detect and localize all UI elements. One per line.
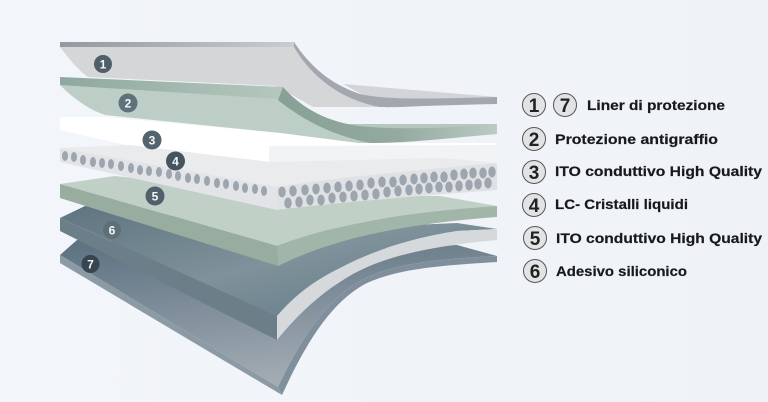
legend row: ITO second: 5 bbox=[530, 229, 541, 250]
legend row: adhesive: Adesivo siliconico bbox=[556, 263, 687, 279]
badge 3: 3 bbox=[149, 134, 156, 148]
legend row: adhesive bbox=[524, 260, 687, 283]
legend row: ITO second: ITO conduttivo High Quality bbox=[556, 230, 762, 246]
badge 2 bbox=[118, 94, 138, 112]
legend row: scratch protection: 2 bbox=[529, 130, 539, 151]
layer 1: top liner bbox=[60, 42, 497, 107]
crystal dots bbox=[62, 151, 496, 208]
legend row: scratch protection bbox=[522, 128, 718, 151]
badge 6 bbox=[103, 221, 121, 239]
layer 3: conductive ITO white bbox=[60, 117, 497, 170]
legend row: ITO second bbox=[524, 226, 762, 250]
legend row: ITO bbox=[522, 160, 762, 184]
badge 5 bbox=[146, 186, 164, 206]
badge 1: 1 bbox=[100, 58, 107, 72]
legend row: liner: 1 bbox=[529, 96, 540, 117]
legend row: ITO: 3 bbox=[529, 163, 539, 184]
legend row: LC bbox=[522, 194, 688, 217]
badge 7 bbox=[82, 255, 100, 273]
legend row: LC: 4 bbox=[529, 196, 540, 217]
badge 6: 6 bbox=[109, 224, 116, 238]
layer 4: liquid crystals bbox=[60, 145, 497, 210]
badge 2: 2 bbox=[125, 96, 132, 110]
legend row: liner bbox=[522, 94, 725, 117]
layer 2: scratch protection bbox=[60, 77, 497, 143]
badge 7: 7 bbox=[87, 258, 94, 272]
legend row: liner: Liner di protezione bbox=[587, 97, 725, 113]
legend bbox=[522, 94, 762, 283]
badge 5: 5 bbox=[152, 190, 159, 204]
badge 4: 4 bbox=[172, 154, 179, 168]
layer 5: conductive ITO bbox=[60, 176, 497, 266]
legend row: LC: LC- Cristalli liquidi bbox=[555, 196, 688, 212]
badge 1 bbox=[94, 55, 112, 73]
legend row: scratch protection: Protezione antigraffio bbox=[555, 131, 718, 147]
legend row: adhesive: 6 bbox=[530, 262, 540, 283]
layer 7: bottom liner bbox=[60, 240, 497, 395]
layer 6: silicone adhesive bbox=[60, 206, 497, 340]
legend row: liner: 7 bbox=[560, 96, 570, 117]
legend row: ITO: ITO conduttivo High Quality bbox=[555, 163, 762, 179]
badge 4 bbox=[166, 152, 185, 170]
badge 3 bbox=[142, 130, 162, 150]
